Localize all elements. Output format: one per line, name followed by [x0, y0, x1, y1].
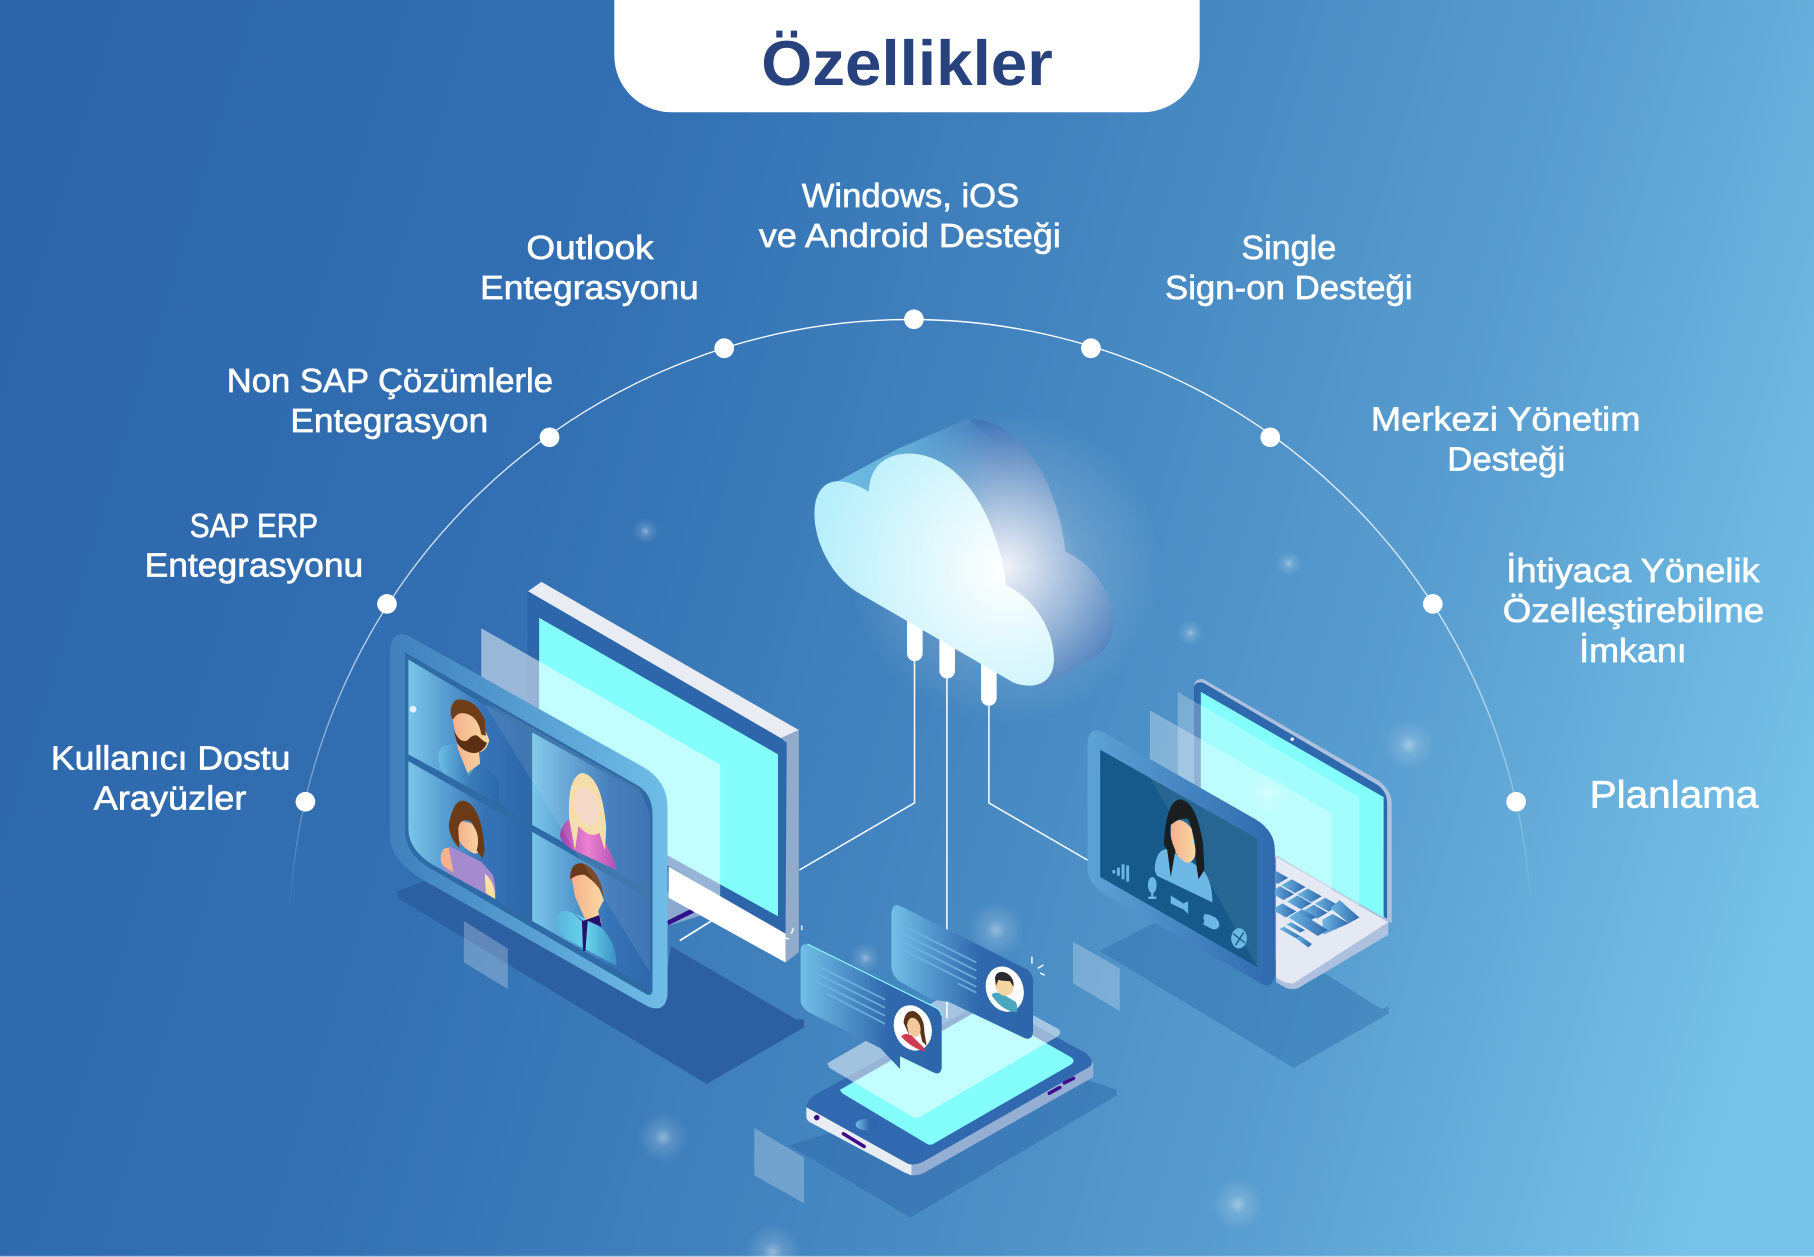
laptop [1150, 679, 1392, 989]
label: Non SAP Çözümlerle Entegrasyon: Non SAP Çözümlerle [227, 363, 553, 400]
monitor stand [636, 879, 706, 926]
title: Özellikler [761, 27, 1053, 99]
person: brown-haired woman [441, 801, 495, 899]
chat bubble: right [891, 905, 1045, 1039]
glint [410, 706, 416, 713]
laptop lid [1194, 679, 1392, 923]
label: İhtiyaca Yönelik Özelleştirebilme İmkanı: İhtiyaca Yönelik [1506, 552, 1760, 590]
label: Windows, iOS ve Android Desteği: Windows, iOS [802, 178, 1019, 215]
desktop monitor [481, 582, 802, 963]
label: Kullanıcı Dostu Arayüzler [51, 740, 290, 817]
phone home button [856, 1119, 879, 1130]
label: Windows, iOS ve Android Desteği [759, 178, 1061, 255]
arc dots [296, 309, 1526, 812]
phone right edge [912, 1062, 1093, 1175]
video cell: bottom left [408, 761, 525, 916]
label: Non SAP Çözümlerle Entegrasyon: Entegrasyon [290, 403, 488, 440]
avatar: woman [887, 1000, 938, 1056]
label: İhtiyaca Yönelik Özelleştirebilme İmkanı: Özelleştirebilme [1503, 593, 1764, 630]
monitor side [781, 730, 799, 963]
keyboard deck [1276, 855, 1388, 984]
monitor top edge [528, 582, 799, 738]
phone left edge [806, 1107, 912, 1175]
avatar: man [979, 961, 1030, 1017]
cloud [814, 419, 1113, 687]
cloud glow [848, 411, 1160, 723]
chat lines [816, 965, 885, 1024]
label: Single Sign-on Desteği [1165, 230, 1413, 307]
keyboard [1264, 870, 1359, 948]
label: Kullanıcı Dostu Arayüzler: Kullanıcı Dostu [51, 740, 290, 777]
phone translucent layer [827, 982, 1060, 1118]
laptop base [1276, 855, 1388, 989]
cloud front [814, 454, 1054, 686]
cloud connector pegs [907, 613, 997, 706]
label: Merkezi Yönetim Desteği [1371, 401, 1640, 478]
icon: close button [1231, 928, 1247, 948]
label: İhtiyaca Yönelik Özelleştirebilme İmkanı [1503, 552, 1764, 670]
translucent panel under monitor [464, 921, 508, 989]
label: Windows, iOS ve Android Desteği: ve Android Desteği [759, 218, 1061, 255]
person: man in blue jacket [556, 863, 617, 966]
icon: signal bars [1112, 864, 1129, 882]
label: Non SAP Çözümlerle Entegrasyon [227, 363, 553, 440]
monitor body [528, 591, 787, 935]
label: SAP ERP Entegrasyonu [145, 508, 363, 585]
phone screen [840, 1009, 1074, 1145]
translucent panel under laptop [1073, 942, 1120, 1011]
phone [806, 982, 1093, 1175]
bubble top edge [808, 944, 942, 1016]
tablet screen [1100, 750, 1258, 967]
tablet shine [1150, 777, 1258, 967]
panel frame [390, 634, 668, 1008]
person: blonde woman [560, 773, 617, 870]
phone body [806, 1002, 1092, 1165]
icon: microphone [1148, 877, 1157, 899]
video call panel [390, 634, 668, 1008]
translucent panel near phone [754, 1128, 804, 1203]
person: woman with black hair [1155, 799, 1212, 902]
feature arc [290, 320, 1531, 914]
label: Planlama: Planlama [1590, 773, 1759, 816]
translucent layer [481, 628, 720, 897]
label: Merkezi Yönetim Desteği: Merkezi Yönetim [1371, 401, 1640, 438]
panel inner line [405, 653, 652, 995]
status ticks [784, 926, 802, 939]
label: İhtiyaca Yönelik Özelleştirebilme İmkanı: İmkanı [1579, 632, 1687, 670]
label: Merkezi Yönetim Desteği: Desteği [1447, 441, 1565, 478]
label: Kullanıcı Dostu Arayüzler: Arayüzler [94, 780, 247, 817]
label: SAP ERP Entegrasyonu: SAP ERP [190, 508, 318, 545]
connector lines [680, 659, 1089, 1018]
webcam [1291, 738, 1294, 741]
label: Outlook Entegrasyonu: Entegrasyonu [480, 270, 699, 307]
background sparkles [633, 518, 1435, 1257]
monitor screen [539, 618, 778, 916]
label: Single Sign-on Desteği: Sign-on Desteği [1165, 270, 1413, 307]
bottom edge strip [0, 1256, 1814, 1257]
video cell: top right [532, 732, 650, 891]
chat bubble: left [801, 944, 942, 1074]
laptop shadow [1100, 923, 1389, 1068]
phone shadow [789, 1064, 1116, 1218]
laptop screen [1201, 692, 1384, 917]
laptop glow [1247, 772, 1289, 813]
monitor chin [669, 867, 786, 963]
video cell: bottom right [532, 832, 650, 989]
chat lines [903, 926, 976, 993]
icon: chat bubble [1203, 914, 1219, 929]
panel shine [485, 705, 650, 973]
phone speaker and camera [843, 1078, 1074, 1147]
label: Outlook Entegrasyonu [480, 230, 699, 307]
sparkle ticks [1032, 957, 1045, 975]
title tab [614, 0, 1200, 112]
monitor shadow [397, 882, 804, 1084]
translucent layer 2 [1150, 710, 1332, 891]
video cell: top left [408, 659, 525, 818]
person: bearded man [438, 699, 499, 804]
translucent layer 1 [1178, 692, 1359, 906]
label: Outlook Entegrasyonu: Outlook [526, 230, 654, 267]
label: Single Sign-on Desteği: Single [1241, 230, 1336, 267]
video tablet [1087, 730, 1275, 985]
tablet frame [1087, 730, 1275, 985]
label: SAP ERP Entegrasyonu: Entegrasyonu [145, 548, 363, 585]
icon: camera [1171, 895, 1188, 914]
